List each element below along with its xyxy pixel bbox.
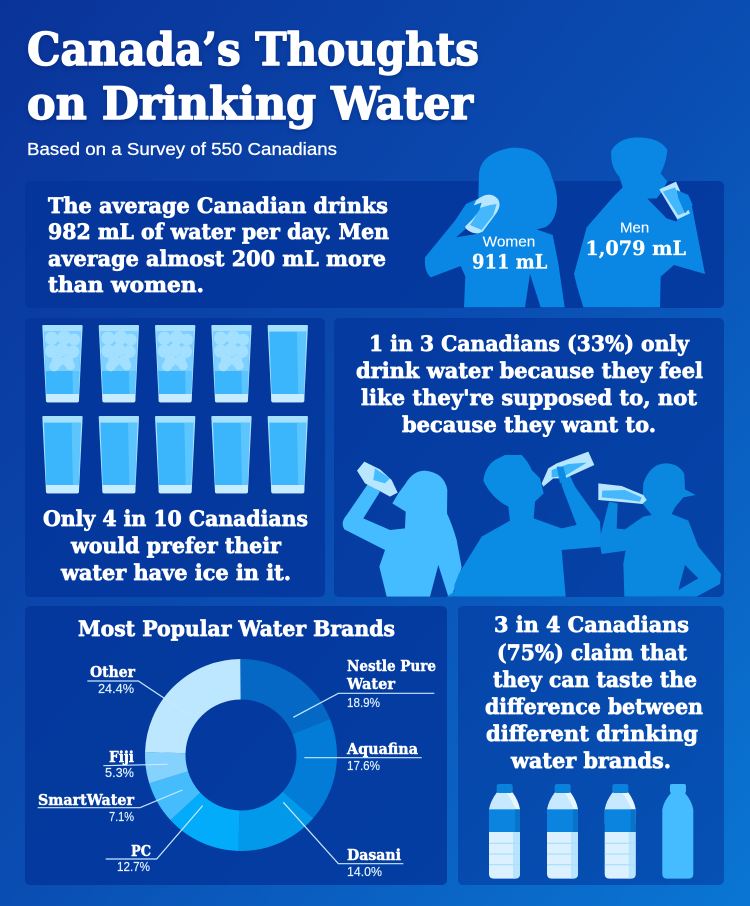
- text block: obligation: drink water because they feel: [356, 358, 703, 383]
- label: men: Men: [620, 221, 649, 237]
- label: other: 24.4%: [98, 681, 134, 696]
- icon: man silhouette: [447, 455, 602, 597]
- label: aquafina: [346, 741, 419, 773]
- donut chart: [165, 679, 317, 831]
- icon: woman's glass: [460, 195, 500, 233]
- panel: average daily intake: [25, 137, 724, 308]
- icon: man's glass: [659, 182, 693, 219]
- text block: taste: they can taste the: [493, 667, 697, 692]
- icon: cap wearer's bottle: [598, 483, 647, 504]
- label: fiji: [105, 749, 134, 780]
- icon: plain bottle: [662, 784, 693, 879]
- text block: obligation: like they're supposed to, not: [361, 385, 697, 410]
- label: pc: 12.7%: [117, 859, 150, 874]
- value: men intake: 1,079 mL: [585, 236, 686, 260]
- label: dasani: 14.0%: [347, 864, 382, 879]
- text block: average intake: [48, 193, 389, 297]
- subtitle: Based on a Survey of 550 Canadians: [27, 139, 337, 159]
- title: [27, 23, 479, 130]
- icon: labelled bottles: [489, 784, 636, 879]
- text block: taste: different drinking: [486, 721, 698, 746]
- value: women intake: 911 mL: [472, 249, 547, 273]
- text block: obligation: [356, 331, 703, 437]
- panel: popular brands: [25, 606, 447, 885]
- panel: ice preference: [25, 318, 325, 597]
- icon: glasses without ice: [42, 325, 308, 493]
- label: other: [90, 664, 135, 696]
- icon: man's bottle: [542, 452, 594, 487]
- label: dasani: [347, 847, 401, 879]
- label: aquafina: 17.6%: [347, 758, 380, 773]
- label: smartwater: SmartWater: [38, 792, 134, 809]
- label: pc: PC: [131, 843, 151, 860]
- text block: taste: water brands.: [510, 748, 671, 773]
- label: nestle pure water: [346, 658, 436, 710]
- icon: woman drinking silhouette: [425, 148, 565, 307]
- text block: ice preference: water have ice in it.: [60, 560, 291, 585]
- text block: ice preference: [43, 506, 308, 585]
- heading: brands: Most Popular Water Brands: [78, 616, 395, 641]
- label: nestle pure water: Water: [346, 676, 395, 693]
- text block: average intake: 982 mL of water per day. Men: [48, 219, 389, 244]
- text block: average intake: The average Canadian drinks: [48, 193, 388, 218]
- text block: taste: (75%) claim that: [497, 640, 687, 665]
- text block: taste: [485, 612, 703, 773]
- icon: woman silhouette: [343, 471, 462, 597]
- label: smartwater: 7.1%: [109, 809, 134, 824]
- text block: obligation: 1 in 3 Canadians (33%) only: [369, 331, 690, 356]
- icon: three people drinking: [343, 452, 721, 597]
- label: fiji: 5.3%: [105, 765, 134, 780]
- icon: glasses with ice: [42, 325, 252, 402]
- label: fiji: Fiji: [109, 749, 134, 766]
- icon: person with cap silhouette: [599, 463, 721, 597]
- label: pc: [117, 843, 151, 874]
- icon: woman's bottle: [357, 462, 398, 497]
- label: smartwater: [38, 792, 134, 824]
- panel: taste the difference: [458, 606, 724, 885]
- text block: average intake: than women.: [48, 272, 204, 297]
- leader lines: [38, 681, 434, 864]
- text block: obligation: because they want to.: [402, 412, 656, 437]
- text block: taste: 3 in 4 Canadians: [494, 612, 689, 637]
- text block: taste: difference between: [485, 694, 703, 719]
- text block: average intake: average almost 200 mL more: [48, 246, 386, 271]
- text block: ice preference: Only 4 in 10 Canadians: [43, 506, 308, 531]
- label: dasani: Dasani: [347, 847, 401, 864]
- label: other: Other: [90, 664, 135, 681]
- icon: man drinking silhouette: [574, 137, 705, 307]
- title: Canada’s Thoughts: [27, 23, 479, 76]
- label: women: Women: [483, 235, 535, 251]
- title: on Drinking Water: [27, 77, 474, 130]
- text block: ice preference: would prefer their: [70, 533, 282, 558]
- label: aquafina: Aquafina: [346, 741, 419, 758]
- panel: obligation: [334, 318, 724, 597]
- label: nestle pure water: Nestle Pure: [347, 658, 436, 675]
- label: nestle pure water: 18.9%: [347, 695, 380, 710]
